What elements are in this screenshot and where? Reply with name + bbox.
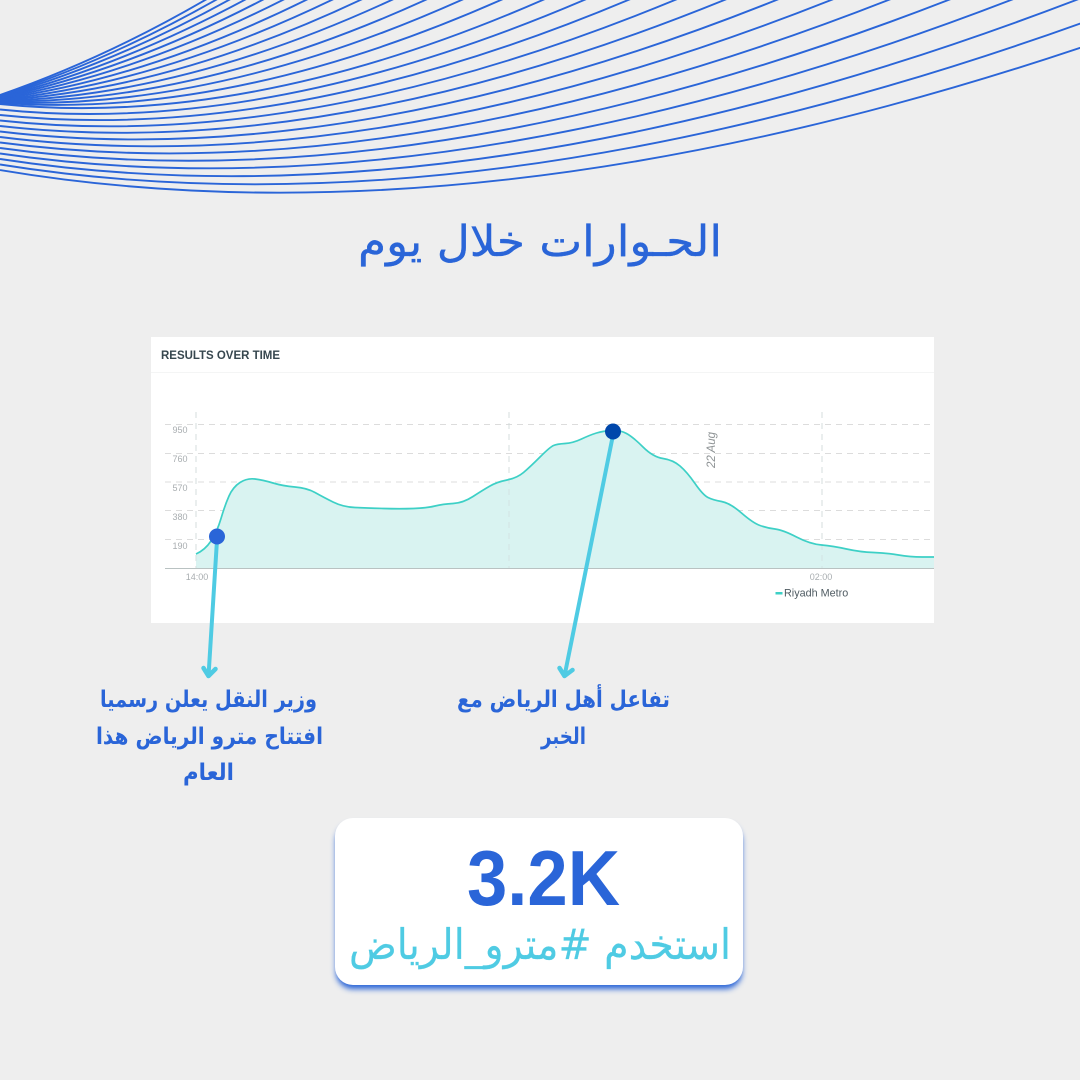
x axis labels: 02:00 <box>810 572 832 582</box>
y axis labels: 950 <box>172 425 188 435</box>
legend: Riyadh Metro <box>784 588 848 600</box>
chart heading: RESULTS OVER TIME <box>161 350 280 362</box>
annotation: Riyadh reaction <box>457 683 670 750</box>
y axis labels: 760 <box>172 454 188 464</box>
date label: 22 Aug <box>706 431 718 469</box>
y axis labels <box>172 425 188 551</box>
y axis labels: 380 <box>172 512 188 522</box>
y axis labels: 570 <box>172 483 188 493</box>
arrow: minister announcement <box>204 540 217 676</box>
annotation: Riyadh reaction: الخبر <box>540 724 586 750</box>
marker: first event <box>209 528 225 544</box>
stat number: 3.2K <box>467 834 620 922</box>
annotation: minister announcement: العام <box>183 760 234 786</box>
x axis labels: 14:00 <box>186 572 208 582</box>
area series: Riyadh Metro <box>196 412 934 568</box>
annotation: minister announcement <box>96 687 323 786</box>
panel: results over time chart <box>151 337 934 623</box>
stat caption: استخدم #مترو_الرياض <box>349 920 731 969</box>
y axis labels: 190 <box>172 541 188 551</box>
marker: peak <box>605 424 621 440</box>
x axis labels <box>186 572 832 582</box>
arrow: Riyadh reaction <box>560 435 613 676</box>
annotation: minister announcement: افتتاح مترو الرياض هذا <box>96 724 323 750</box>
decorative curved line bundle <box>0 0 1080 194</box>
title: الحـوارات خلال يوم <box>358 217 722 267</box>
stat card background <box>335 818 743 985</box>
annotation: minister announcement: وزير النقل يعلن رسميا <box>100 687 317 713</box>
annotation: Riyadh reaction: تفاعل أهل الرياض مع <box>457 683 670 713</box>
